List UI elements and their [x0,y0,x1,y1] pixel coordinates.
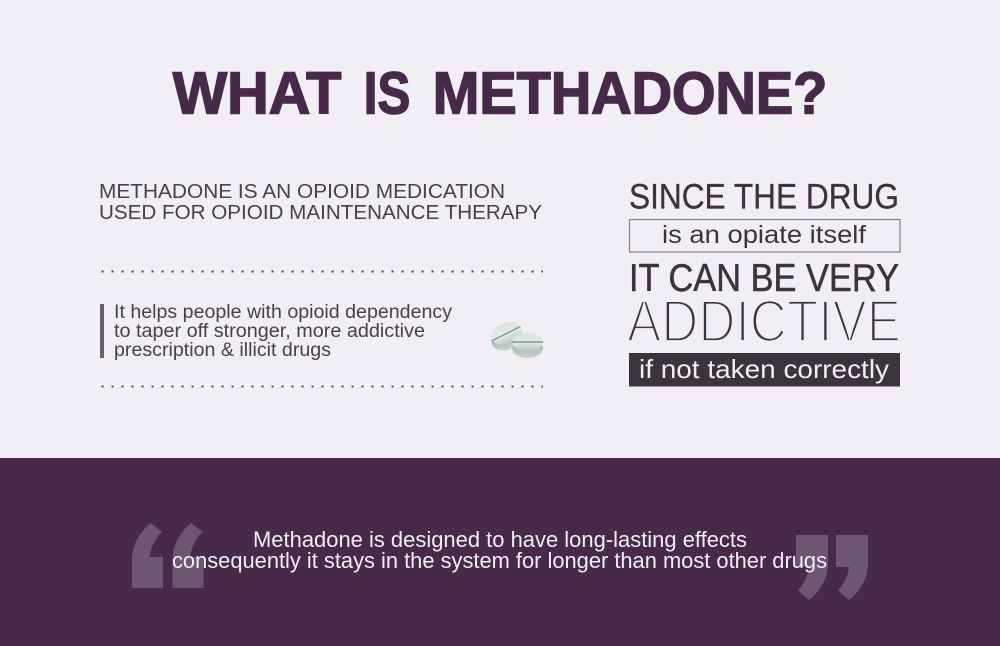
icon: pills [488,318,543,358]
panel: quote band [0,458,1000,646]
title: WHAT [173,60,341,126]
panel: definition text: USED FOR OPIOID MAINTENANCE THERAPY [99,202,542,224]
panel: definition text [99,181,542,224]
panel: definition text: METHADONE IS AN OPIOID MEDICATION [99,181,505,203]
accent bar [100,304,104,358]
outlined box: is an opiate itself: is an opiate itself [662,221,866,249]
heading: addictive: ADDICTIVE [627,288,901,354]
quote text: Methadone is designed to have long-lasting effects [253,527,747,552]
panel: addictive warning [627,178,901,386]
icon: closing quote mark [796,535,868,600]
quote text [172,527,827,573]
text block: how it helps: prescription & illicit drugs [114,340,331,361]
icon: opening quote mark [132,523,204,588]
quote text: consequently it stays in the system for longer than most other drugs [172,548,827,573]
title: METHADONE? [433,60,827,126]
outlined box: is an opiate itself [630,220,900,252]
filled box: if not taken correctly: if not taken correctly [639,354,889,384]
heading: it can be very: IT CAN BE VERY [629,257,899,300]
heading: since the drug: SINCE THE DRUG [629,178,899,216]
title: IS [364,60,410,126]
text block: how it helps: to taper off stronger, more addictive [114,321,425,342]
text block: how it helps: It helps people with opioid dependency [114,302,453,323]
text block: how it helps [114,302,453,361]
title [173,60,827,126]
